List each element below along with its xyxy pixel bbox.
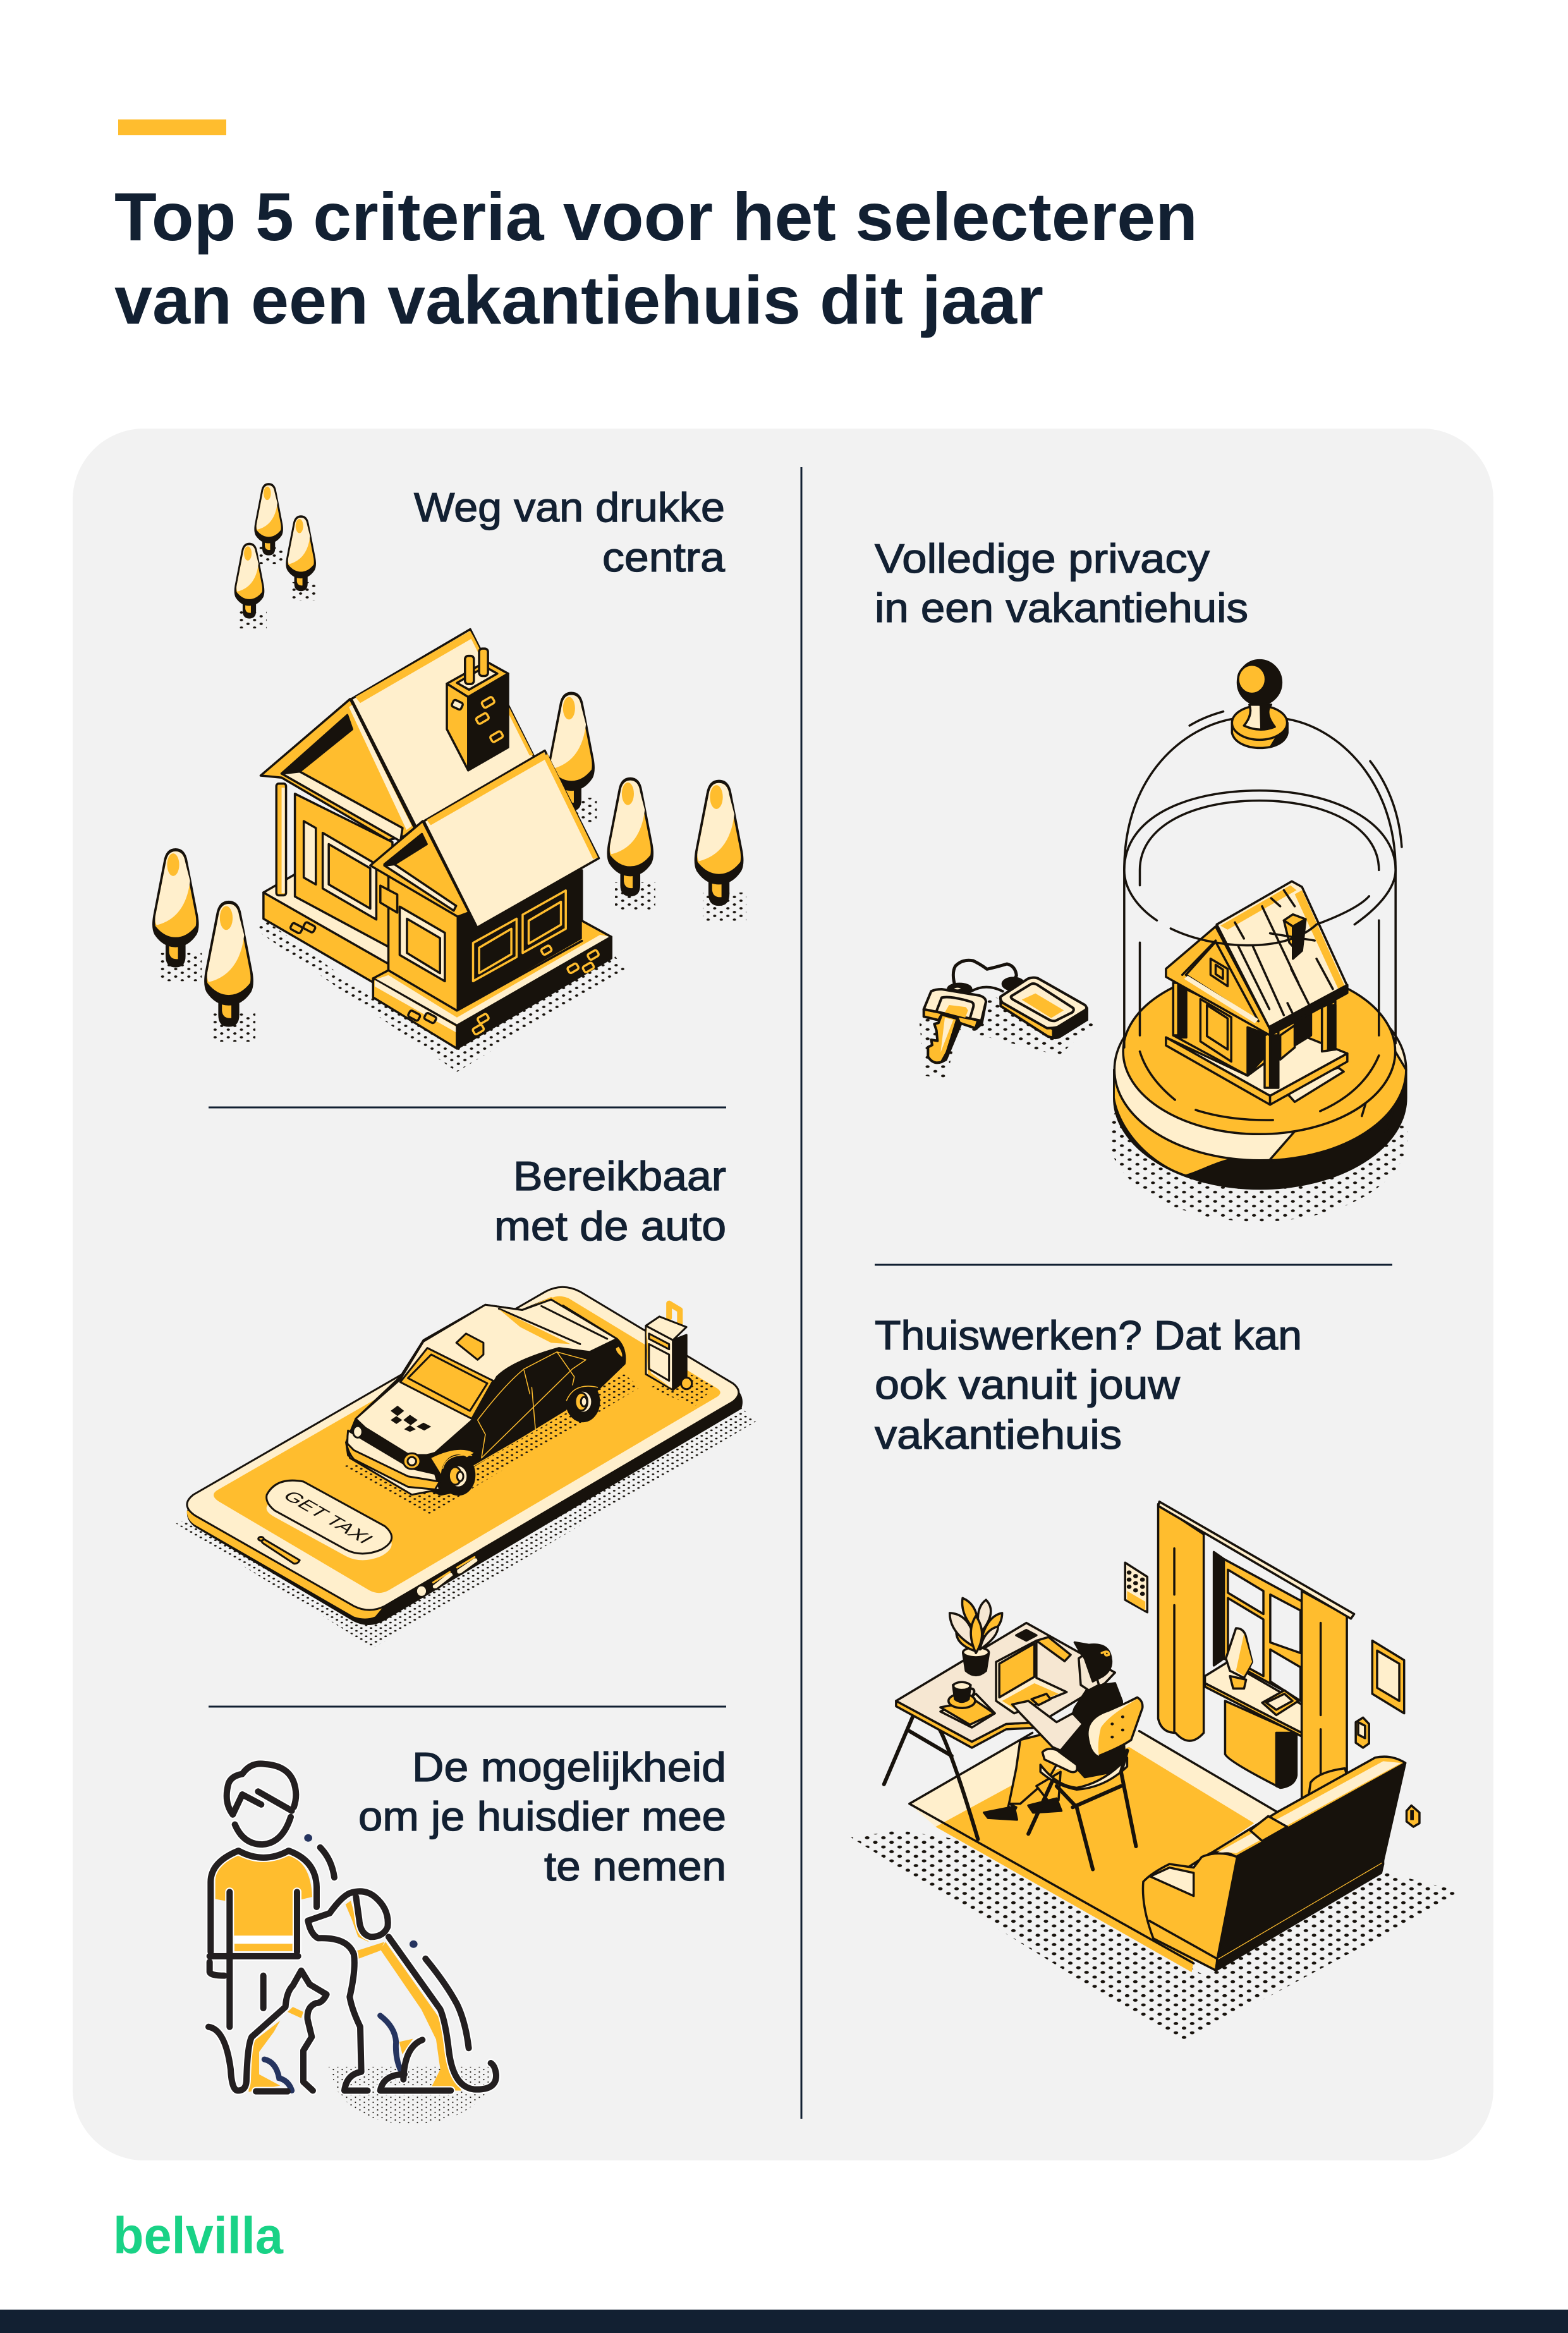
phone dot shadow — [176, 1407, 756, 1648]
logo: belvilla — [113, 2207, 284, 2265]
keys dot shadow — [920, 997, 1095, 1080]
phone body — [186, 1287, 741, 1624]
heading: volledige privacy: Volledige privacy — [875, 535, 1210, 582]
room dot shadow — [851, 1830, 1464, 2043]
key fob — [1000, 978, 1087, 1038]
illustration: home office room — [851, 1502, 1464, 2043]
icon: keys and key fob — [924, 960, 1087, 1063]
illustration: person with dog and cat — [209, 1763, 496, 2124]
heading: bereikbaar met de auto: Bereikbaar — [513, 1153, 726, 1199]
laptop — [996, 1641, 1067, 1714]
footer bar — [0, 2310, 1568, 2333]
heading: weg van drukke centra: centra — [602, 534, 726, 580]
desk — [884, 1598, 1115, 1839]
heading: huisdier mee nemen: om je huisdier mee — [358, 1793, 726, 1839]
rug — [909, 1731, 1279, 1972]
panel: criteria background — [73, 429, 1493, 2160]
line art — [209, 1763, 496, 2092]
title — [114, 178, 1198, 338]
line art halo — [209, 1763, 496, 2092]
dome dot shadow — [1109, 1051, 1408, 1222]
tree dot shadows — [159, 546, 746, 1072]
illustration: house with trees — [154, 484, 746, 1072]
heading: thuiswerken: vakantiehuis — [875, 1411, 1122, 1458]
cup and papers — [940, 1694, 995, 1727]
window and curtains — [1158, 1502, 1354, 1798]
heading: huisdier mee nemen: De mogelijkheid — [412, 1744, 726, 1790]
dome knob — [1232, 661, 1287, 748]
heading: huisdier mee nemen — [358, 1744, 726, 1889]
key — [924, 989, 986, 1063]
miniature house — [1166, 881, 1347, 1105]
wall items — [1125, 1562, 1419, 1827]
heading: huisdier mee nemen: te nemen — [544, 1843, 726, 1889]
pet dot shadow — [329, 2067, 489, 2124]
chimney — [447, 649, 508, 771]
illustration: taxi on smartphone — [176, 1287, 756, 1648]
taxi car — [346, 1297, 625, 1495]
heading: thuiswerken: ook vanuit jouw — [875, 1361, 1181, 1408]
base plinth — [1114, 969, 1406, 1189]
heading: weg van drukke centra: Weg van drukke — [414, 484, 725, 530]
suitcase — [646, 1303, 692, 1390]
small and large trees — [154, 484, 743, 1026]
button label: GET TAXI — [277, 1489, 378, 1547]
person at desk — [984, 1642, 1143, 1869]
heading: volledige privacy — [875, 535, 1248, 631]
house — [260, 630, 611, 1049]
get taxi button — [267, 1492, 392, 1560]
heading: thuiswerken: Thuiswerken? Dat kan — [875, 1312, 1302, 1358]
car and suitcase dot shadows — [344, 1374, 640, 1516]
heading: bereikbaar met de auto — [494, 1153, 726, 1249]
illustration: house under glass dome — [920, 661, 1408, 1222]
heading: weg van drukke centra — [414, 484, 726, 580]
title: van een vakantiehuis dit jaar — [114, 262, 1043, 338]
heading: bereikbaar met de auto: met de auto — [494, 1203, 726, 1249]
sofa — [1143, 1757, 1406, 1970]
navy legs and dots — [264, 2016, 400, 2090]
colour fills — [216, 1856, 461, 2092]
heading: volledige privacy: in een vakantiehuis — [875, 585, 1248, 631]
accent bar — [118, 119, 226, 135]
glass dome — [1124, 712, 1402, 1047]
desk plant — [963, 1653, 989, 1675]
title: Top 5 criteria voor het selecteren — [114, 178, 1198, 255]
heading: thuiswerken — [875, 1312, 1302, 1458]
